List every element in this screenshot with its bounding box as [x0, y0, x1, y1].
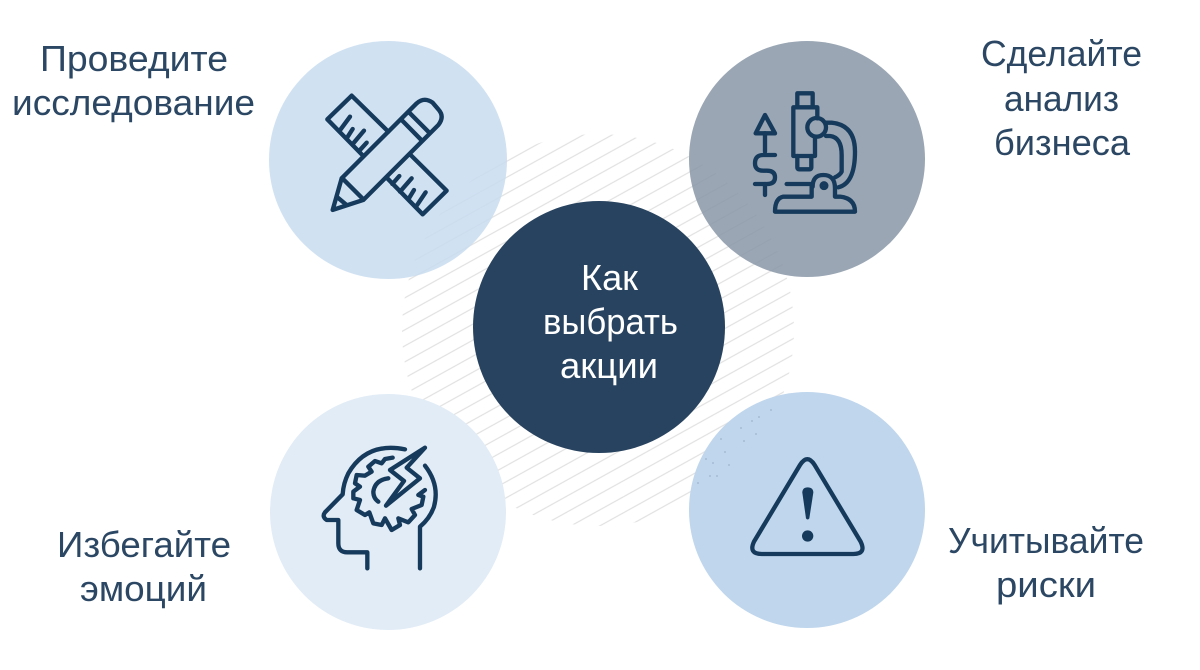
icon: head with gear and lightning [324, 448, 436, 568]
center title: акции [560, 345, 658, 386]
circle: business analysis [689, 41, 925, 277]
label: business analysis: бизнеса [994, 122, 1131, 163]
circle: consider risks [689, 392, 925, 628]
label: research: исследование [12, 82, 255, 123]
icon: warning triangle [752, 459, 863, 554]
center title [543, 257, 678, 386]
label: business analysis: анализ [1004, 78, 1119, 119]
icon: pencil and ruler [327, 96, 447, 214]
decorative dots [697, 409, 772, 484]
label: business analysis [981, 33, 1142, 163]
center title: Как [581, 257, 638, 298]
label: research [12, 38, 255, 123]
label: avoid emotions: Избегайте [57, 524, 231, 565]
hatched background disc [402, 134, 794, 526]
label: avoid emotions: эмоций [80, 568, 207, 609]
label: avoid emotions [57, 524, 231, 609]
center title: выбрать [543, 301, 678, 342]
icon: microscope and dollar arrow [755, 93, 855, 212]
label: consider risks: Учитывайте [948, 520, 1144, 561]
circle: research [269, 41, 507, 279]
label: research: Проведите [40, 38, 228, 79]
center circle [473, 201, 725, 453]
label: consider risks [948, 520, 1144, 605]
label: business analysis: Сделайте [981, 33, 1142, 74]
circle: avoid emotions [270, 394, 506, 630]
label: consider risks: риски [996, 564, 1096, 605]
